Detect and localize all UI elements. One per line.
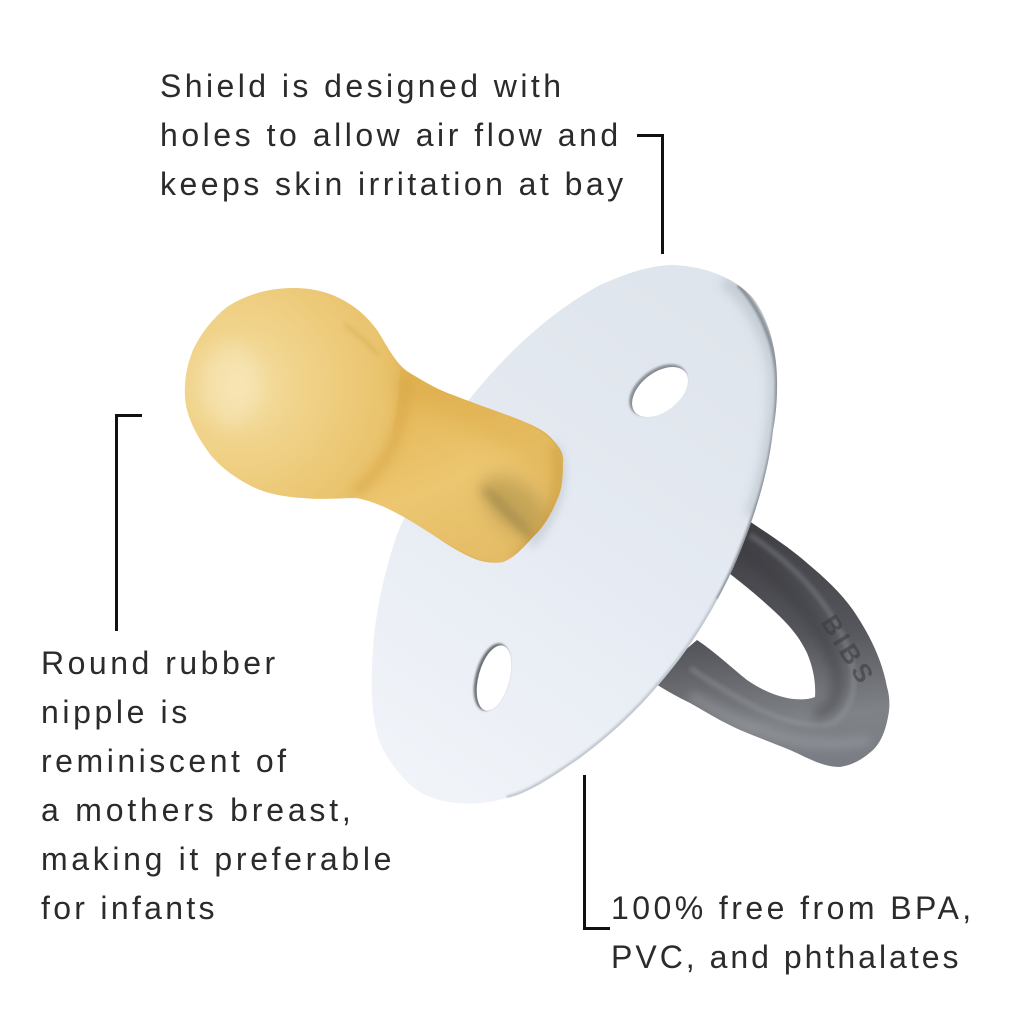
leader line: nipple [115, 414, 142, 631]
callout: shield text [160, 68, 627, 202]
callout: nipple text: making it preferable [41, 841, 395, 877]
callout: nipple text: for infants [41, 890, 218, 926]
callout: nipple text: a mothers breast, [41, 792, 355, 828]
ring logo text: BIBS [815, 609, 882, 691]
leader line: shield [637, 134, 664, 254]
callout: shield text: keeps skin irritation at bay [160, 166, 627, 202]
handle ring [650, 515, 889, 767]
pacifier illustration [184, 265, 890, 804]
callout: materials text: 100% free from BPA, [611, 890, 975, 926]
rubber nipple [185, 280, 580, 563]
callout: materials text: PVC, and phthalates [611, 939, 962, 975]
rubber nipple shadow [530, 445, 560, 545]
callout: shield text: Shield is designed with [160, 68, 564, 104]
callout: nipple text: nipple is [41, 694, 191, 730]
callout: shield text: holes to allow air flow and [160, 117, 622, 153]
callout: nipple text [41, 645, 395, 926]
shield air hole top [620, 354, 697, 427]
callout: nipple text: Round rubber [41, 645, 279, 681]
callout: nipple text: reminiscent of [41, 743, 290, 779]
shield [372, 265, 777, 804]
shield air hole bottom [467, 639, 518, 715]
callout: materials text [611, 890, 975, 975]
leader line: materials [583, 775, 610, 930]
